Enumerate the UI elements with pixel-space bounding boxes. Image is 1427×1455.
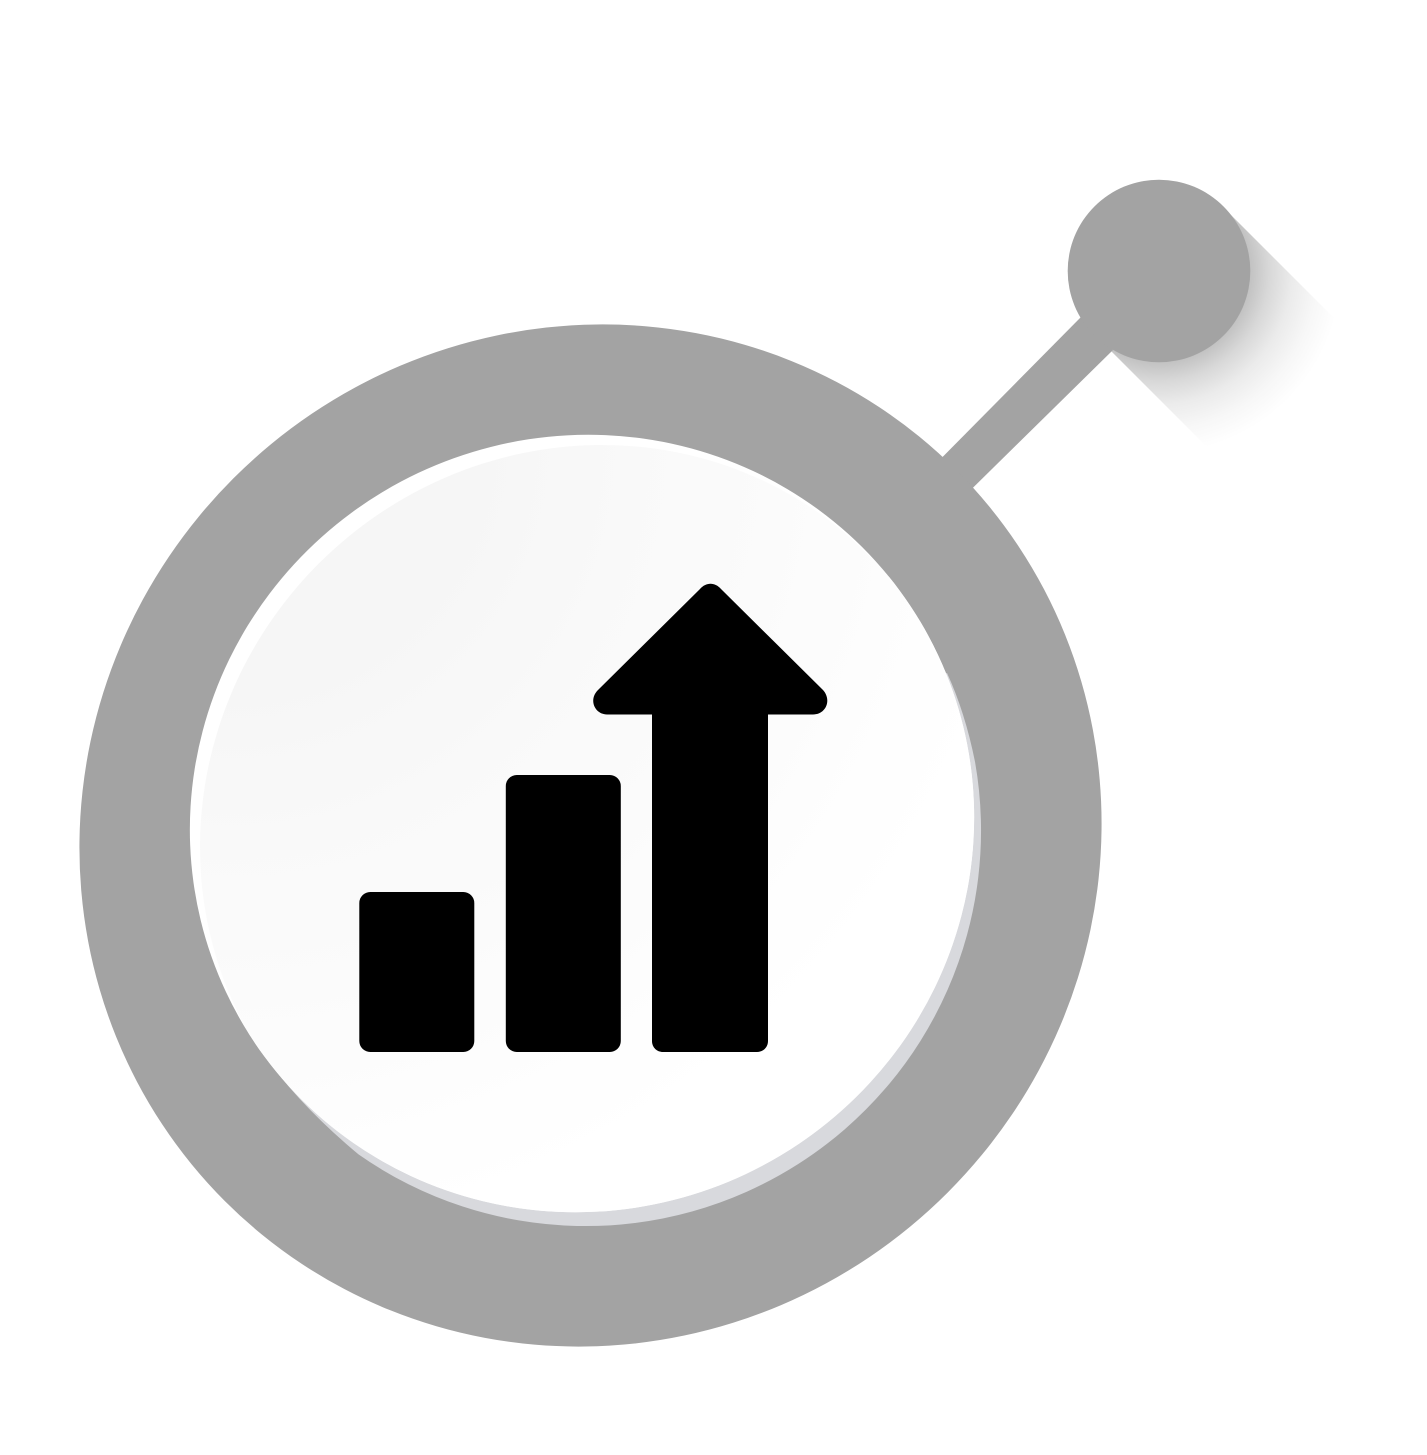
arrow	[593, 584, 827, 1052]
dish shadow crescent	[262, 673, 981, 1226]
dish white rim	[190, 435, 974, 1212]
long shadow of small circle	[1095, 207, 1352, 464]
antenna stick	[900, 317, 1113, 530]
antenna ball	[1068, 180, 1250, 362]
small bar	[359, 892, 474, 1052]
outer gray ring	[79, 324, 1102, 1347]
infographic icon: growth chart in a gray ring with antenna	[79, 180, 1314, 1347]
icon: rising bar chart with arrow	[359, 584, 827, 1052]
medium bar	[506, 775, 621, 1052]
inner dish	[190, 435, 981, 1226]
dish face	[200, 445, 980, 1225]
